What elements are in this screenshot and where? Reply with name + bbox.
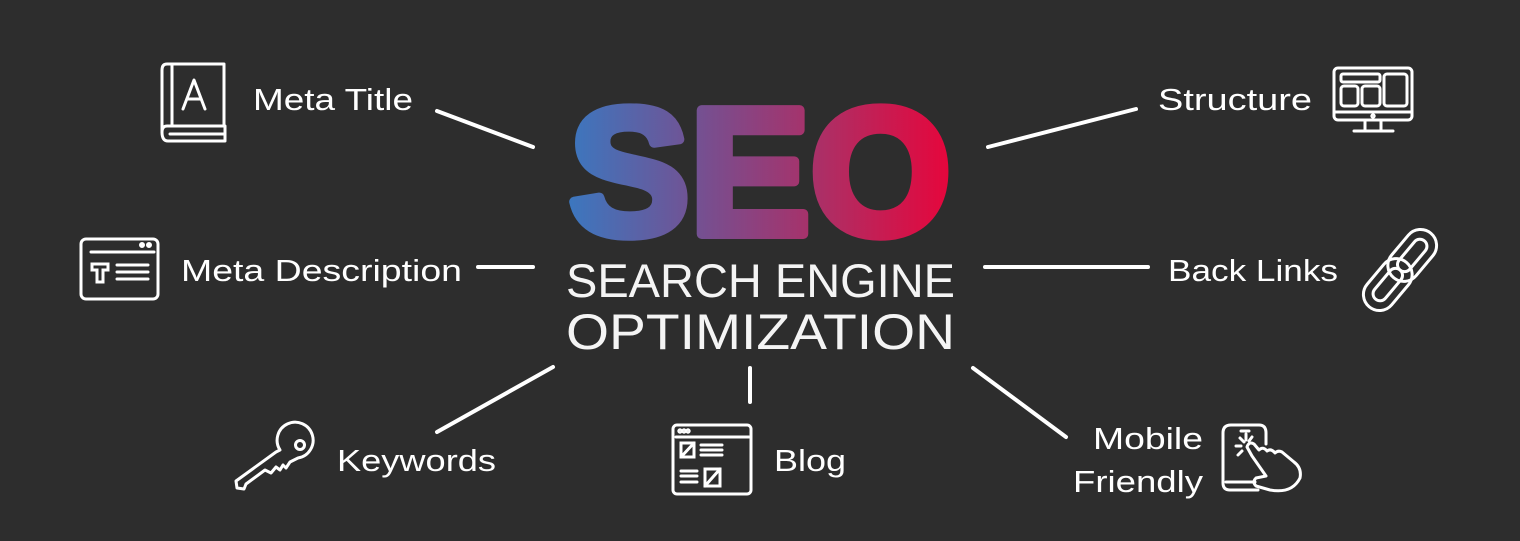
icon: book [162,64,225,141]
labels: Keywords [337,443,496,478]
labels: Meta Description [181,253,462,288]
labels: Blog [774,443,846,478]
subtitle: OPTIMIZATION [566,304,955,360]
labels: Structure [1158,82,1312,117]
labels: Meta Title [253,82,413,117]
subtitle [566,254,955,360]
labels: Mobile [1093,421,1203,456]
icon: monitor [1334,68,1412,131]
icon: blog page [673,425,751,494]
icon: chain link [1357,223,1443,317]
subtitle: SEARCH ENGINE [566,254,955,307]
title: SEO [566,72,955,360]
icon: meta description browser [81,239,158,299]
labels [181,82,1338,499]
icon: key [236,422,313,489]
connector lines [437,109,1148,437]
icon: mobile phone with hand [1223,425,1300,491]
title: SEO: SEO [569,72,951,273]
labels: Friendly [1073,464,1204,499]
labels: Back Links [1168,253,1338,288]
